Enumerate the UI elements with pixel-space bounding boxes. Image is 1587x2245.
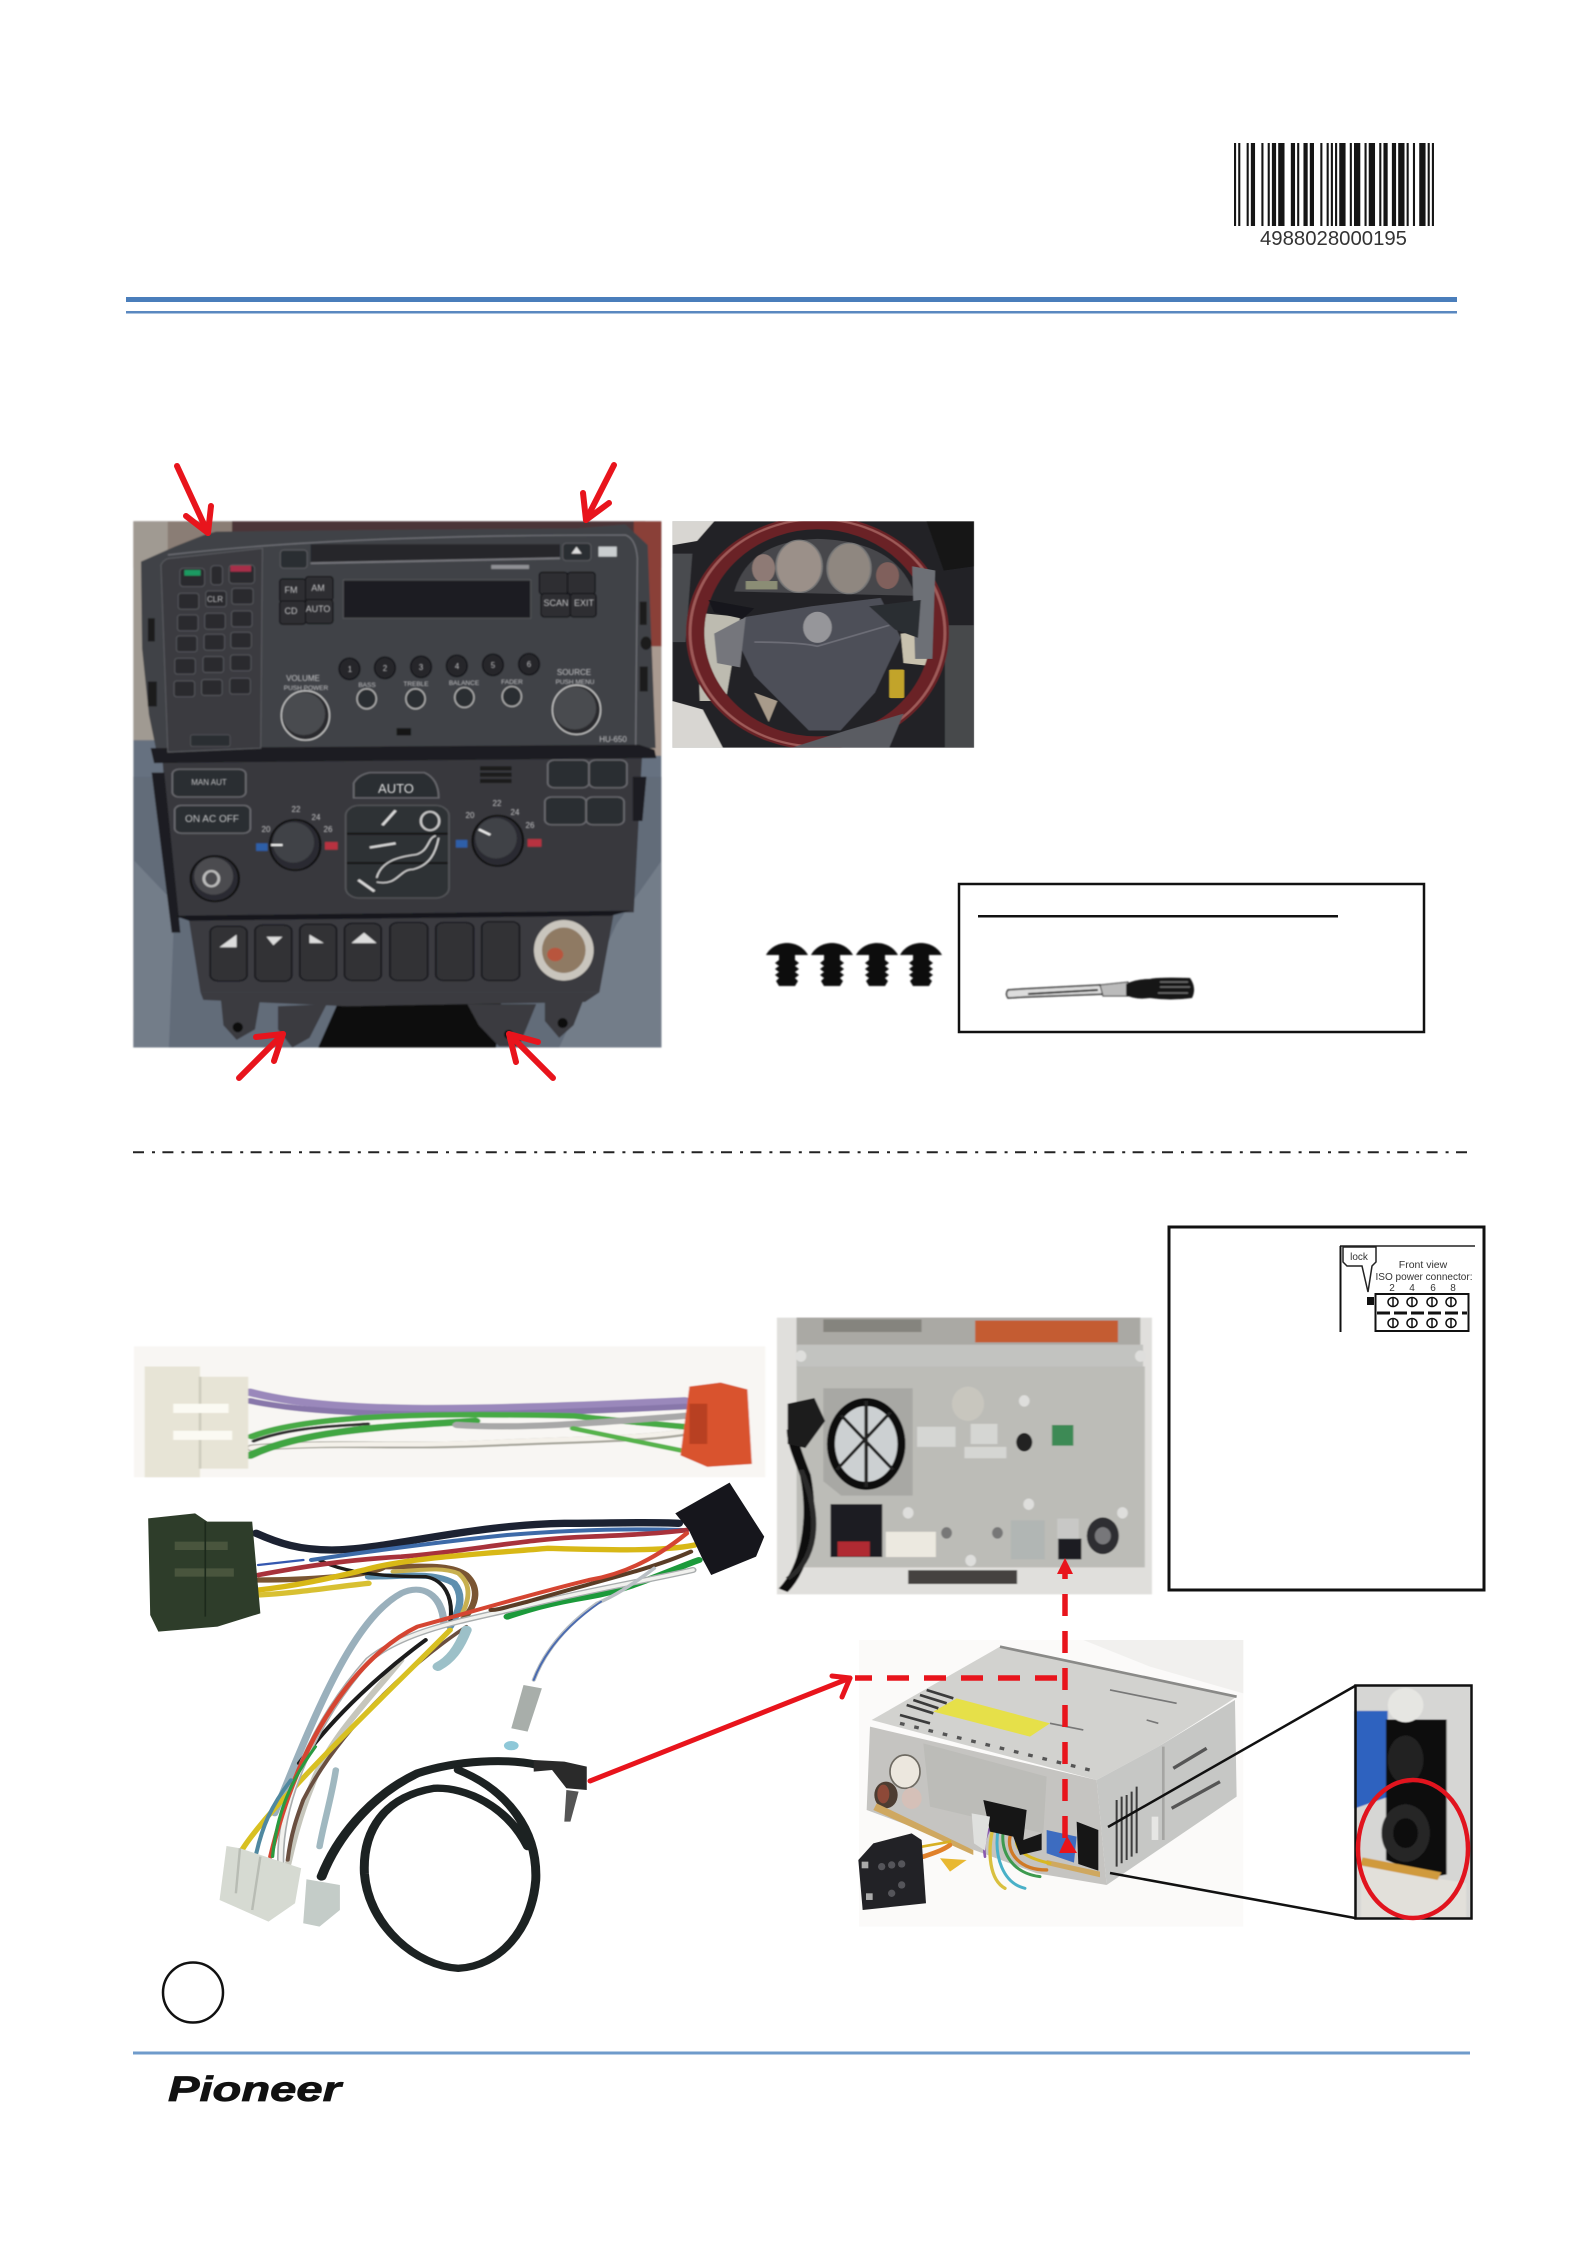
zoom guide lines: [1108, 1686, 1355, 1918]
panel button labels: TREBLE: [403, 681, 429, 688]
panel button labels: ON AC OFF: [185, 814, 239, 825]
panel button labels: VOLUME: [286, 674, 320, 683]
inset: connector close-up: [1355, 1685, 1472, 1919]
wires: [922, 1827, 1050, 1888]
panel button labels: CLR: [207, 595, 223, 604]
photo: AV unit rear panel: [777, 1318, 1152, 1594]
panel button labels: [185, 583, 627, 834]
red connector: [680, 1383, 752, 1467]
black cable: [783, 1430, 809, 1590]
photo: SRC harness adapter: [134, 1346, 765, 1477]
lower switch bank: [189, 914, 614, 992]
arrow: bottom right: [509, 1034, 553, 1078]
arrow: aux cable to input: [590, 1676, 850, 1781]
panel button labels: FADER: [501, 679, 523, 686]
mode block: [346, 805, 449, 898]
panel button labels: 26: [526, 821, 535, 830]
audio jack: [534, 1760, 587, 1790]
wheel rim: [695, 523, 940, 743]
gauge cluster: [734, 539, 915, 596]
panel button labels: 22: [292, 805, 301, 814]
panel button labels: SCAN: [543, 598, 569, 608]
panel button labels: AUTO: [306, 604, 330, 614]
sockets: [830, 1504, 882, 1557]
side: [1097, 1700, 1237, 1885]
wheel hub: [740, 598, 901, 730]
climate section: [162, 749, 642, 918]
barcode: [1234, 143, 1434, 250]
ISO connector diagram: 6: [1430, 1283, 1436, 1294]
panel button labels: AUTO: [378, 781, 414, 796]
wires: [242, 1523, 699, 1968]
red highlight ellipse: [1358, 1780, 1468, 1918]
blue and black sockets: [1047, 1830, 1077, 1863]
panel button labels: 3: [419, 663, 424, 672]
keypad buttons: [174, 565, 255, 697]
temperature dials: [191, 816, 523, 901]
panel button labels: 1: [348, 665, 353, 674]
panel button labels: 26: [324, 825, 333, 834]
disc slot: [311, 544, 560, 563]
black connector on wires: [983, 1800, 1042, 1855]
top cover: [872, 1647, 1237, 1780]
icon: screwdriver: [1006, 978, 1194, 1000]
panel button labels: FM: [284, 585, 298, 595]
ISO connector diagram: 8: [1450, 1283, 1456, 1294]
panel button labels: 5: [491, 661, 496, 670]
ISO connector info box: [1169, 1227, 1484, 1590]
panel button labels: BASS: [358, 682, 376, 689]
dark harness connector: [148, 1513, 260, 1632]
ISO connector diagram: [1340, 1246, 1475, 1332]
panel button labels: CD: [284, 606, 298, 616]
small knobs: [357, 686, 521, 709]
ISO connector diagram: 4: [1409, 1283, 1415, 1294]
preset buttons: [339, 654, 539, 680]
photo: radio and climate panel: [133, 521, 661, 1048]
ISO connector diagram: 2: [1389, 1283, 1395, 1294]
radio buttons: [280, 572, 596, 624]
black ISO connector: [675, 1483, 764, 1575]
panel button labels: 20: [466, 811, 475, 820]
wires: [250, 1392, 685, 1455]
panel button labels: 20: [262, 825, 271, 834]
panel button labels: PUSH MENU: [555, 679, 595, 686]
lighter socket: [534, 920, 594, 981]
panel button labels: 22: [493, 799, 502, 808]
mounting tabs: [200, 992, 599, 1048]
grey pin and speck: [511, 1685, 542, 1732]
panel button labels: 24: [312, 813, 321, 822]
ISO connector diagram: Front view: [1399, 1259, 1448, 1271]
arrow: top left: [177, 466, 211, 533]
panel button labels: 24: [511, 808, 520, 817]
header rule lines: [126, 297, 1457, 314]
panel button labels: 6: [527, 660, 532, 669]
panel button labels: EXIT: [574, 598, 594, 608]
ISO connector diagram: ISO power connector:: [1376, 1271, 1472, 1283]
photo: steering wheel: [672, 519, 974, 748]
fan: [823, 1388, 913, 1496]
photo: main wiring harness: [148, 1483, 764, 1968]
panel button labels: SOURCE: [557, 668, 591, 677]
panel button labels: PUSH POWER: [284, 685, 329, 692]
tool box: [959, 884, 1424, 1032]
arrow: bottom left: [239, 1034, 283, 1078]
white plug: [220, 1846, 301, 1922]
panel button labels: 4: [455, 662, 460, 671]
barcode number: 4988028000195: [1260, 228, 1407, 250]
ISO connector diagram: lock: [1350, 1252, 1369, 1263]
panel button labels: HU-650: [599, 735, 627, 744]
panel button labels: AM: [311, 583, 325, 593]
small plug: [303, 1879, 340, 1927]
radio face: [141, 524, 656, 763]
panel button labels: 2: [383, 664, 388, 673]
footer rule: [133, 2052, 1470, 2054]
arrow: top right: [583, 465, 614, 520]
white connector: [145, 1366, 248, 1477]
rear panel: [867, 1727, 1107, 1885]
panel button labels: MAN AUT: [191, 778, 227, 787]
section divider: [133, 1151, 1468, 1153]
big knobs: [281, 685, 601, 740]
arrow: dashed path to ports: [855, 1558, 1077, 1853]
panel button labels: BALANCE: [449, 680, 480, 687]
gold PCB strip: [873, 1803, 973, 1855]
step number circle: [163, 1962, 223, 2022]
ISO plug: [858, 1833, 926, 1910]
photo: head unit rear view: [858, 1640, 1243, 1927]
icon: four screws: [766, 943, 942, 986]
display: [343, 580, 531, 618]
Pioneer logo: Pioneer: [168, 2070, 344, 2109]
